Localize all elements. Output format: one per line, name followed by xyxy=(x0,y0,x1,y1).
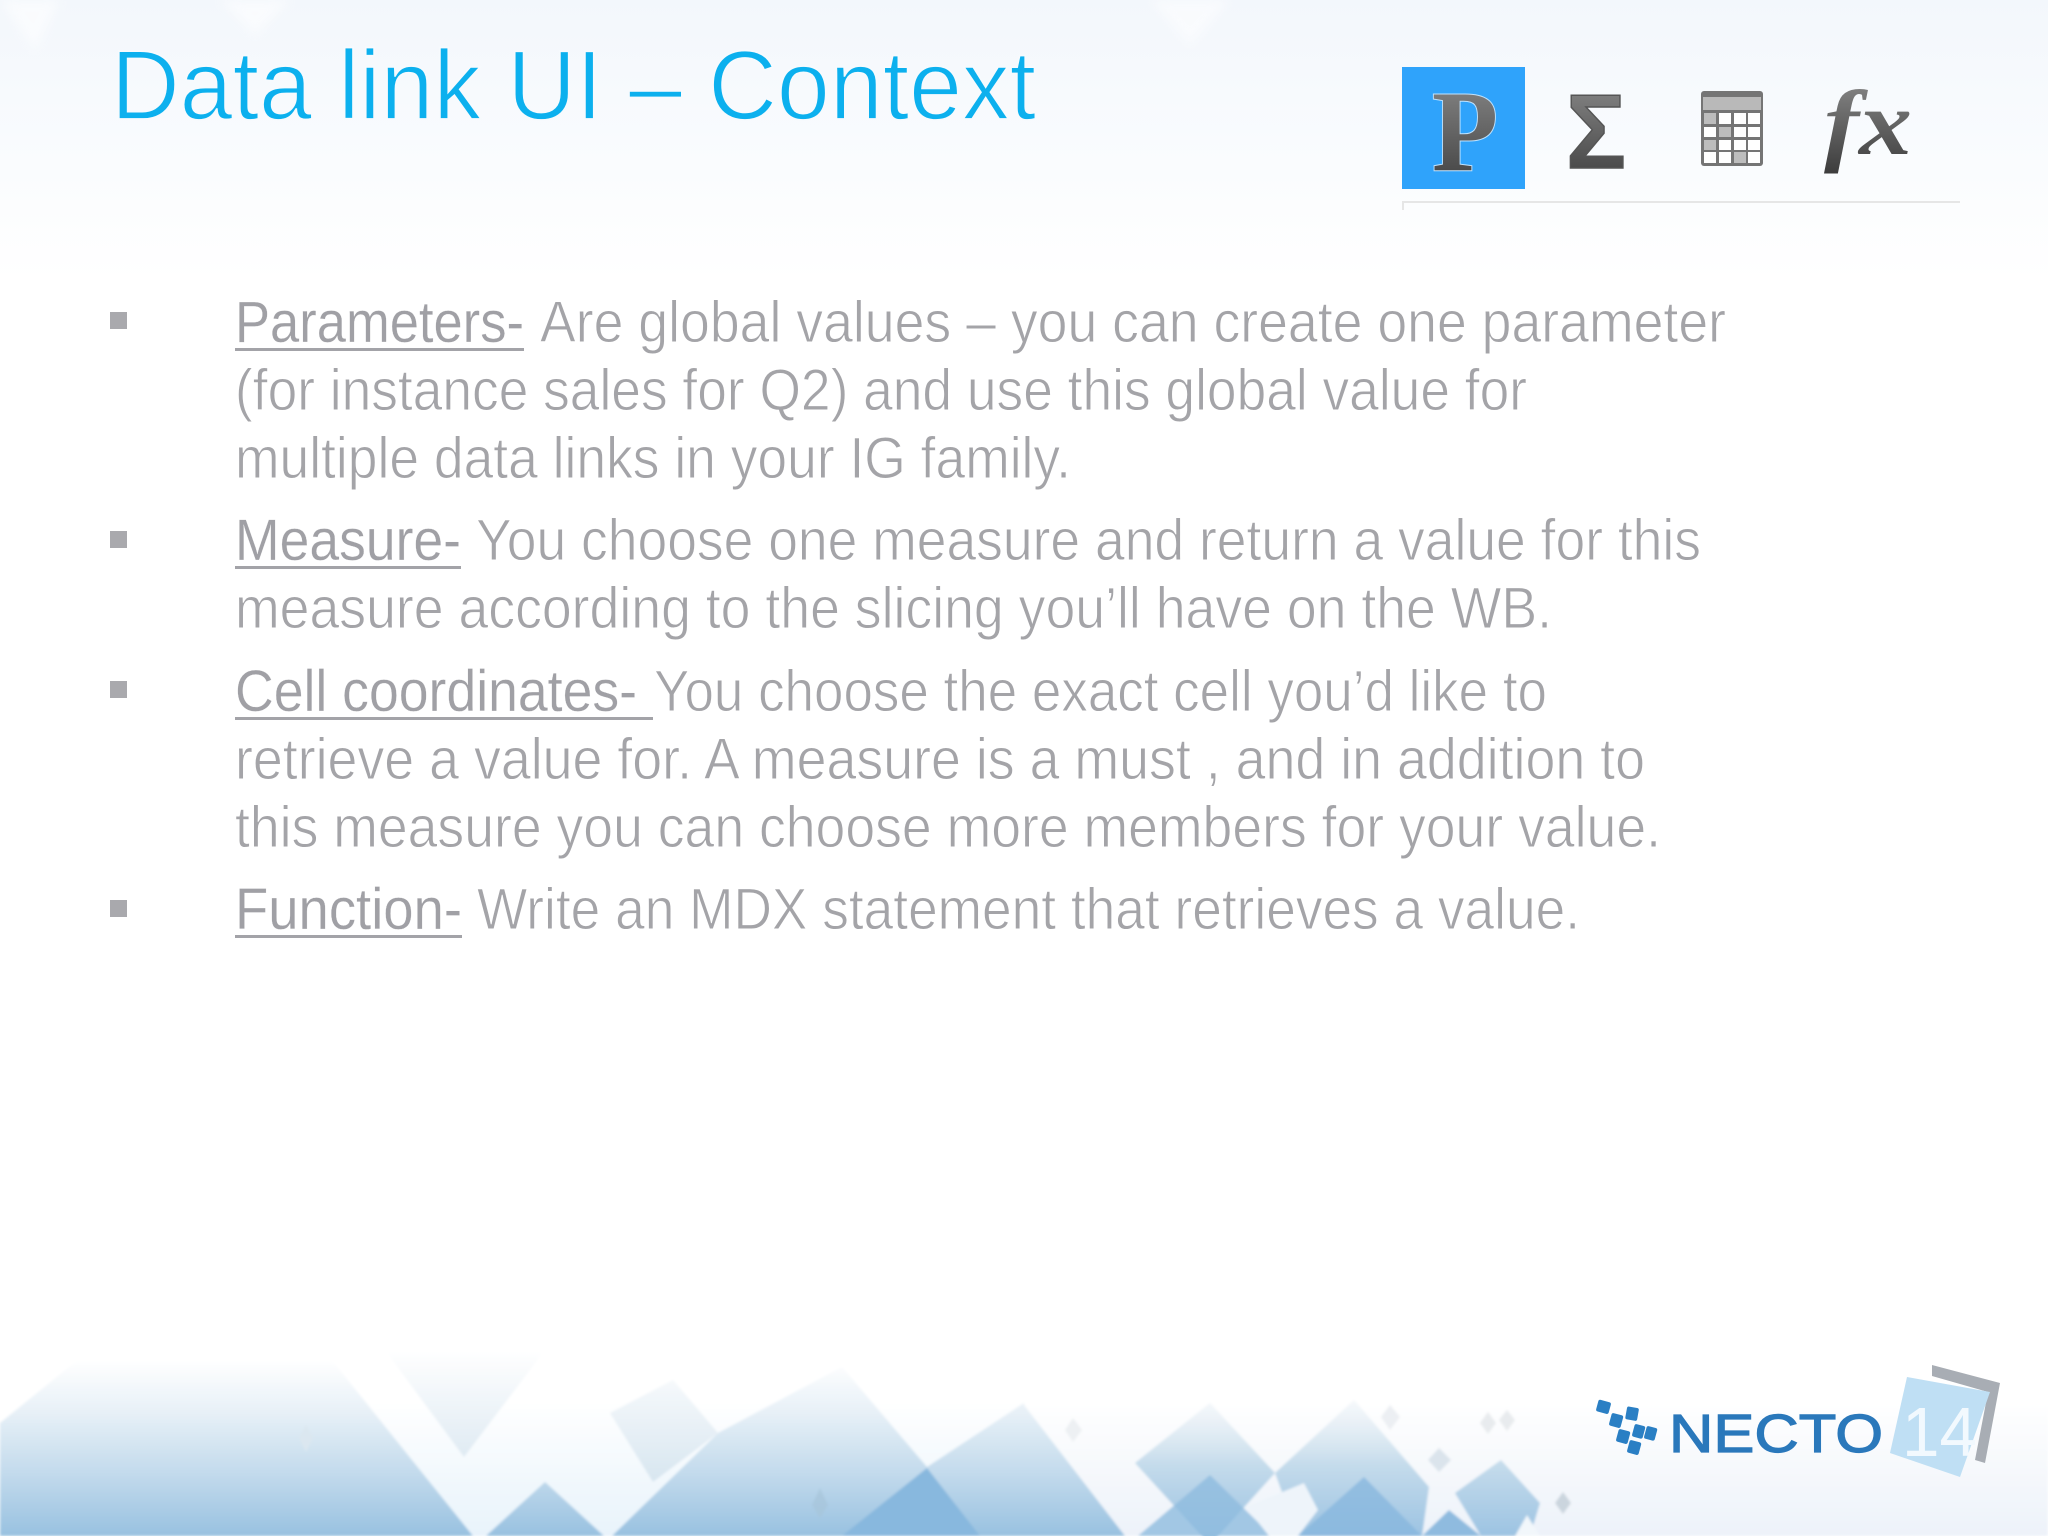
bullet: parameters: Are global values – you can create one parameter xyxy=(540,290,1726,355)
bullet: measure: measure according to the slicing you’ll have on the WB. xyxy=(235,576,1552,641)
bullet: cell coordinates xyxy=(110,659,1661,860)
bullet: function: Write an MDX statement that retrieves a value. xyxy=(477,877,1580,942)
bullet: parameters xyxy=(110,290,1726,491)
logo: NECTO 14 xyxy=(1596,1365,2000,1477)
bullet: cell coordinates: You choose the exact cell you’d like to xyxy=(654,659,1547,724)
icon: parameter P selected: P xyxy=(1432,68,1498,196)
bullet: parameters: Parameters- xyxy=(235,290,524,355)
toolbar rule xyxy=(1403,202,1960,210)
background top wash xyxy=(0,0,2048,280)
bullet list xyxy=(110,290,1726,942)
bullet: cell coordinates: Cell coordinates- xyxy=(235,659,637,724)
bullet: parameters: multiple data links in your IG family. xyxy=(235,426,1071,491)
bullet: cell coordinates: retrieve a value for. A measure is a must , and in addition to xyxy=(235,727,1645,792)
logo book: 14 xyxy=(1902,1393,1977,1471)
logo book xyxy=(1890,1365,2000,1477)
icon: function fx: fx xyxy=(1824,72,1912,174)
bullet: cell coordinates: this measure you can choose more members for your value. xyxy=(235,795,1661,860)
bullet: parameters: (for instance sales for Q2) and use this global value for xyxy=(235,358,1527,423)
title: Data link UI – Context xyxy=(111,30,1036,140)
icon toolbar xyxy=(1402,67,1960,210)
icon: measure sigma: Σ xyxy=(1566,73,1626,191)
bullet: measure: Measure- xyxy=(235,508,461,573)
bullet: measure xyxy=(110,508,1701,641)
bullet: function: Function- xyxy=(235,877,462,942)
logo emblem squares xyxy=(1596,1399,1658,1455)
logo wordmark: NECTO xyxy=(1669,1404,1883,1464)
icon: cell coordinates grid xyxy=(1701,91,1763,166)
background bottom geometric band xyxy=(0,1330,2048,1536)
bullet: measure: You choose one measure and return a value for this xyxy=(476,508,1701,573)
icon: parameter P selected xyxy=(1402,67,1525,196)
